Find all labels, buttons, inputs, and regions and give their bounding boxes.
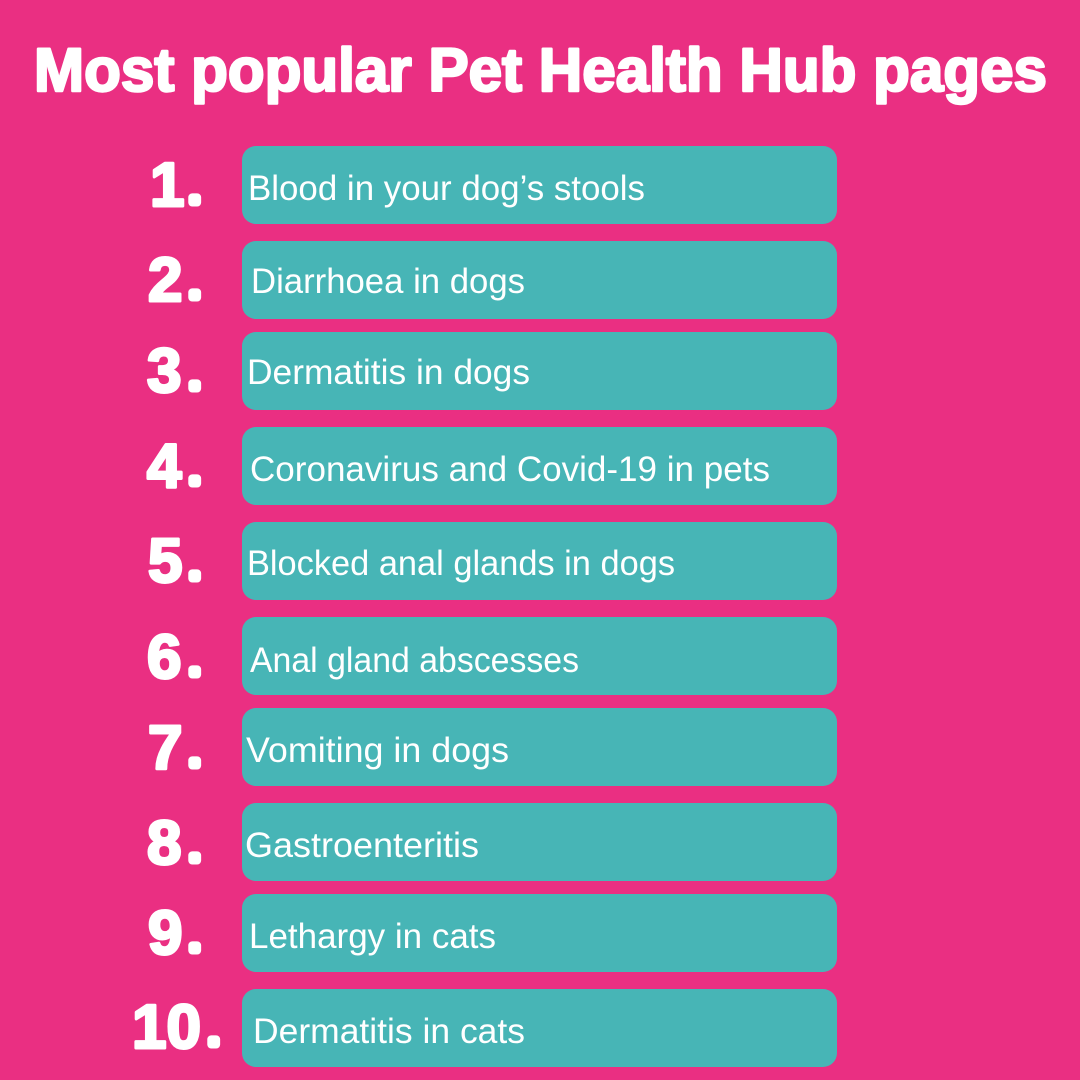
- bar: Vomiting in dogs: Vomiting in dogs: [246, 731, 509, 770]
- number 8: [147, 809, 199, 878]
- number 4: 4: [147, 432, 182, 501]
- list item 9: [148, 894, 837, 972]
- bar: Blood in your dog's stools: Blood in your dog’s stools: [248, 169, 645, 208]
- number 3: [147, 337, 199, 406]
- number 10: .: [209, 1014, 218, 1052]
- bar: Diarrhoea in dogs: [242, 241, 837, 319]
- number 5: 5: [148, 527, 182, 596]
- number 5: .: [190, 548, 199, 586]
- number 6: [147, 623, 199, 692]
- number 10: 10: [132, 993, 201, 1062]
- bar: Lethargy in cats: [242, 894, 837, 972]
- bar: Dermatitis in cats: Dermatitis in cats: [253, 1012, 525, 1051]
- bar: Dermatitis in dogs: [242, 332, 837, 410]
- bar: Vomiting in dogs: [242, 708, 837, 786]
- number 7: [148, 714, 199, 783]
- bar: Dermatitis in cats: [242, 989, 837, 1067]
- number 7: 7: [148, 714, 182, 783]
- number 2: [148, 246, 199, 315]
- number 8: 8: [147, 809, 181, 878]
- number 1: .: [190, 172, 199, 210]
- bar: Anal gland abscesses: Anal gland abscesses: [250, 641, 579, 680]
- list item 6: [147, 617, 837, 695]
- list item 2: [148, 241, 837, 319]
- bar: Lethargy in cats: Lethargy in cats: [249, 917, 496, 956]
- bar: Diarrhoea in dogs: Diarrhoea in dogs: [251, 262, 525, 301]
- number 2: 2: [148, 246, 182, 315]
- bar: Blood in your dog's stools: [242, 146, 837, 224]
- list item 10: [132, 989, 837, 1067]
- number 8: .: [190, 830, 199, 868]
- list item 3: [147, 332, 837, 410]
- number 3: .: [190, 358, 199, 396]
- number 4: .: [190, 454, 199, 492]
- list item 4: [147, 427, 837, 505]
- list item 7: [148, 708, 837, 786]
- number 7: .: [190, 736, 199, 774]
- number 5: [148, 527, 199, 596]
- bar: Blocked anal glands in dogs: [242, 522, 837, 600]
- number 6: .: [190, 644, 199, 682]
- title: Most popular Pet Health Hub pages: [34, 36, 1047, 104]
- number 9: .: [190, 920, 199, 958]
- number 4: [147, 432, 199, 501]
- bar: Coronavirus and Covid-19 in pets: Coronavirus and Covid-19 in pets: [250, 450, 770, 489]
- number 1: [150, 151, 199, 220]
- number 1: 1: [150, 151, 184, 220]
- number 6: 6: [147, 623, 181, 692]
- number 2: .: [190, 268, 199, 306]
- bar: Anal gland abscesses: [242, 617, 837, 695]
- list item 5: [148, 522, 837, 600]
- number 9: 9: [148, 899, 182, 968]
- bar: Dermatitis in dogs: Dermatitis in dogs: [247, 353, 530, 392]
- number 9: [148, 899, 199, 968]
- bar: Blocked anal glands in dogs: Blocked anal glands in dogs: [247, 544, 675, 583]
- list item 1: [150, 146, 837, 224]
- bar: Gastroenteritis: [242, 803, 837, 881]
- number 3: 3: [147, 337, 181, 406]
- list item 8: [147, 803, 837, 881]
- bar: Coronavirus and Covid-19 in pets: [242, 427, 837, 505]
- bar: Gastroenteritis: Gastroenteritis: [245, 826, 479, 865]
